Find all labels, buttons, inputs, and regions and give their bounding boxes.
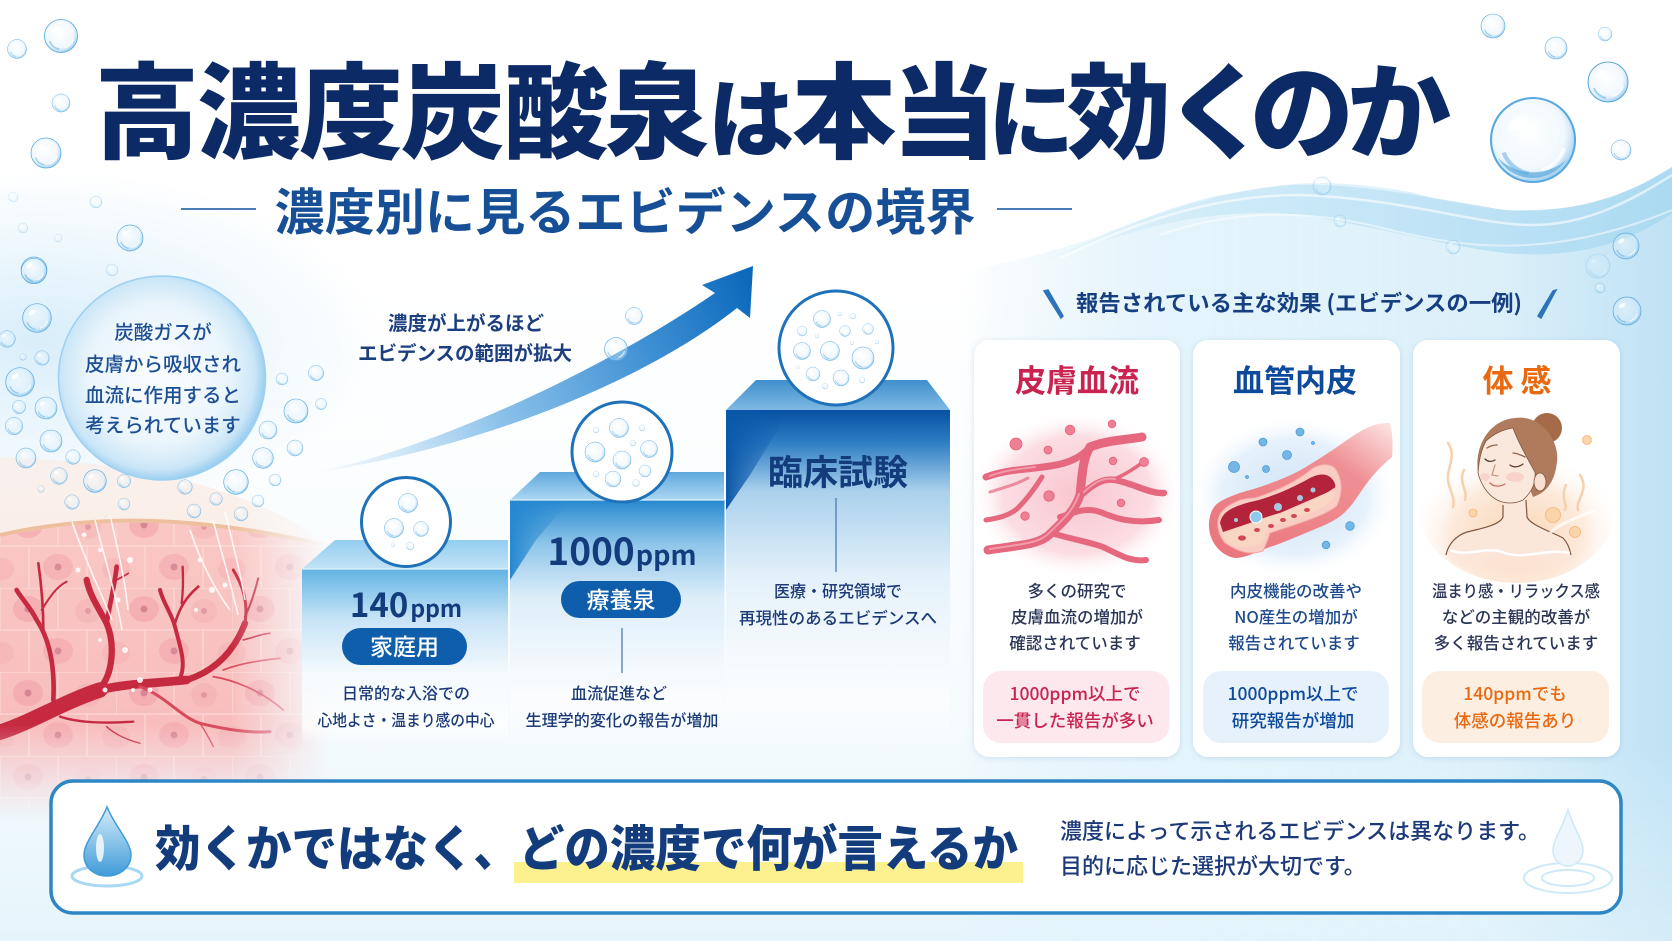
description: 皮膚血流の増加が [1011, 604, 1144, 628]
note pill: 体感の報告あり [1454, 708, 1576, 733]
description: などの主観的改善が [1442, 604, 1591, 628]
arrow caption: エビデンスの範囲が拡大 [358, 337, 572, 366]
title: 濃 [197, 29, 301, 180]
description: 多く報告されています [1434, 630, 1598, 654]
supporting text: 目的に応じた選択が大切です。 [1060, 849, 1366, 881]
step: clinical trial [726, 291, 950, 744]
callout bubble: gas absorption: 炭酸ガスが [114, 316, 212, 345]
icon: water drop [72, 807, 142, 886]
title: 泉 [605, 29, 709, 180]
title: に [988, 50, 1074, 175]
description: 医療・研究領域で [774, 578, 902, 602]
supporting text: 濃度によって示されるエビデンスは異なります。 [1060, 814, 1540, 846]
description: NO産生の増加が [1234, 604, 1358, 628]
step heading: 臨床試験 [768, 445, 908, 496]
title: 本 [792, 29, 896, 180]
note pill: 140ppmでも [1463, 681, 1567, 706]
icon: faint water drop [1524, 809, 1612, 893]
note pill: 研究報告が増加 [1232, 708, 1354, 733]
description [318, 680, 494, 731]
panel: skin blood flow [971, 340, 1183, 757]
description [1009, 578, 1144, 654]
decorative bubbles: top corners [8, 14, 1641, 325]
pill label: 療養泉 [586, 581, 656, 615]
description [739, 578, 937, 629]
card heading: 皮膚血流 [1015, 356, 1139, 401]
illustration: skin cross-section with blood vessels [0, 457, 330, 820]
small bubbles near arrow [604, 308, 642, 360]
bottom banner [51, 781, 1621, 913]
note pill [1422, 671, 1609, 743]
card heading: 体 感 [1482, 356, 1552, 401]
carbon dioxide bubbles rising through skin [0, 258, 327, 692]
icon: medium bubbles [572, 402, 672, 502]
description [1228, 578, 1362, 654]
concentration label: 1000ppm [547, 522, 697, 576]
title: の [1250, 29, 1354, 180]
step: 140ppm home use [302, 478, 508, 744]
title: 度 [299, 29, 403, 180]
effects heading: 報告されている主な効果 (エビデンスの一例) [1076, 286, 1522, 318]
callout bubble: gas absorption: 皮膚から吸収され [85, 348, 241, 377]
key message: 効くかではなく、どの濃度で何が言えるか [155, 810, 1018, 881]
note pill: 1000ppm以上で [1228, 681, 1358, 706]
description: 心地よさ・温まり感の中心 [318, 707, 494, 731]
highlight marker [514, 862, 1023, 883]
note pill: 1000ppm以上で [1010, 681, 1140, 706]
arrow: evidence rising [312, 266, 753, 473]
description: 再現性のあるエビデンスへ [739, 605, 937, 629]
title: 酸 [504, 29, 608, 180]
panel: bodily sensation [1413, 340, 1620, 757]
description [1432, 578, 1600, 654]
description: 生理学的変化の報告が増加 [526, 707, 718, 731]
description: 確認されています [1009, 630, 1141, 654]
icon: dense bubbles [779, 291, 893, 405]
title: 効 [1067, 29, 1171, 180]
title: 当 [892, 29, 996, 180]
callout bubble: gas absorption: 考えられています [85, 409, 241, 438]
description: 温まり感・リラックス感 [1432, 578, 1600, 602]
note pill: 一貫した報告が多い [996, 708, 1154, 733]
description [526, 680, 718, 731]
callout bubble: gas absorption [58, 276, 266, 480]
description: 報告されています [1228, 630, 1360, 654]
concentration label: 140ppm [350, 579, 462, 627]
title: く [1165, 29, 1269, 180]
arrow caption: 濃度が上がるほど [388, 307, 544, 336]
title: 高 [95, 29, 199, 180]
pill label: 家庭用 [370, 628, 439, 662]
illustration: relaxed woman bathing [1417, 413, 1617, 583]
note pill [1203, 671, 1389, 743]
pill label [561, 581, 681, 618]
step: 1000ppm therapeutic spring [510, 402, 724, 744]
note pill [983, 671, 1170, 743]
card heading: 血管内皮 [1233, 356, 1357, 401]
title [95, 29, 1451, 180]
description: 内皮機能の改善や [1230, 578, 1362, 602]
description: 日常的な入浴での [342, 680, 470, 704]
title: は [708, 50, 794, 175]
subtitle: 濃度別に見るエビデンスの境界 [274, 173, 976, 245]
arrow caption [358, 307, 572, 366]
pill label [342, 628, 467, 665]
illustration: branching capillaries [971, 411, 1183, 579]
icon: sparse bubbles [362, 478, 450, 566]
illustration: artery cross-section [1190, 415, 1398, 579]
supporting text [1060, 814, 1540, 881]
description: 多くの研究で [1028, 578, 1126, 602]
description: 血流促進など [571, 680, 667, 704]
callout bubble: gas absorption: 血流に作用すると [85, 379, 241, 408]
title: 炭 [401, 29, 505, 180]
title: か [1347, 29, 1451, 180]
panel: vascular endothelium [1190, 340, 1400, 757]
